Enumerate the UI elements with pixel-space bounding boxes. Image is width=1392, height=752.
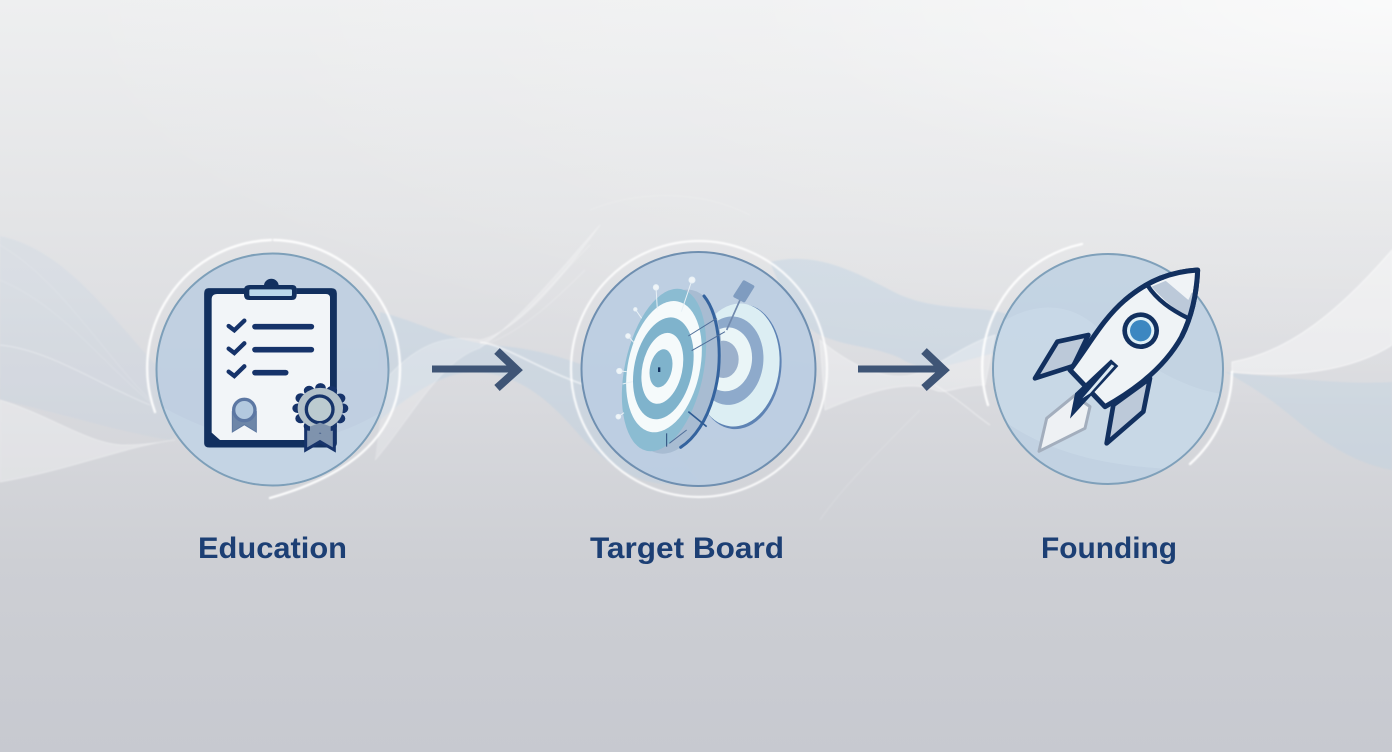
step 2: Target Board	[571, 241, 827, 497]
flowing blue wave ribbons	[0, 236, 1392, 484]
icon: target boards with darts	[608, 277, 788, 462]
large award seal	[298, 388, 343, 450]
front target	[608, 281, 735, 462]
icon: clipboard with checklist and award ribbon	[204, 279, 343, 450]
arrow 2	[858, 351, 944, 388]
rocket fins	[1035, 335, 1088, 378]
arrow 1	[432, 351, 517, 388]
disc: target board	[582, 252, 816, 486]
label: Education: Education	[198, 532, 347, 565]
outer ring arcs: founding	[982, 244, 1232, 464]
outer ring arcs: education	[147, 240, 400, 498]
label: Target Board: Target Board	[590, 532, 784, 565]
white line ribbons	[0, 196, 1392, 520]
rear target	[688, 282, 788, 433]
step 1: Education	[147, 240, 400, 500]
dart shafts	[667, 318, 725, 447]
disc sheen: founding	[994, 320, 1220, 468]
step 3: Founding	[982, 244, 1232, 484]
clipboard clip	[244, 279, 297, 300]
outer ring: target board	[571, 241, 827, 497]
disc: founding	[993, 254, 1223, 484]
checklist lines	[229, 321, 311, 376]
label: Founding: Founding	[1041, 532, 1177, 565]
rocket exhaust	[1070, 359, 1118, 419]
rocket nose shade	[1152, 278, 1193, 317]
rocket flame	[1039, 396, 1090, 451]
icon: rocket	[1035, 270, 1198, 451]
disc sheen: education	[164, 408, 379, 484]
dart pins	[616, 277, 695, 419]
disc: education	[156, 254, 388, 486]
rocket body	[1070, 270, 1198, 407]
small award	[232, 412, 256, 432]
rocket window	[1122, 312, 1159, 349]
